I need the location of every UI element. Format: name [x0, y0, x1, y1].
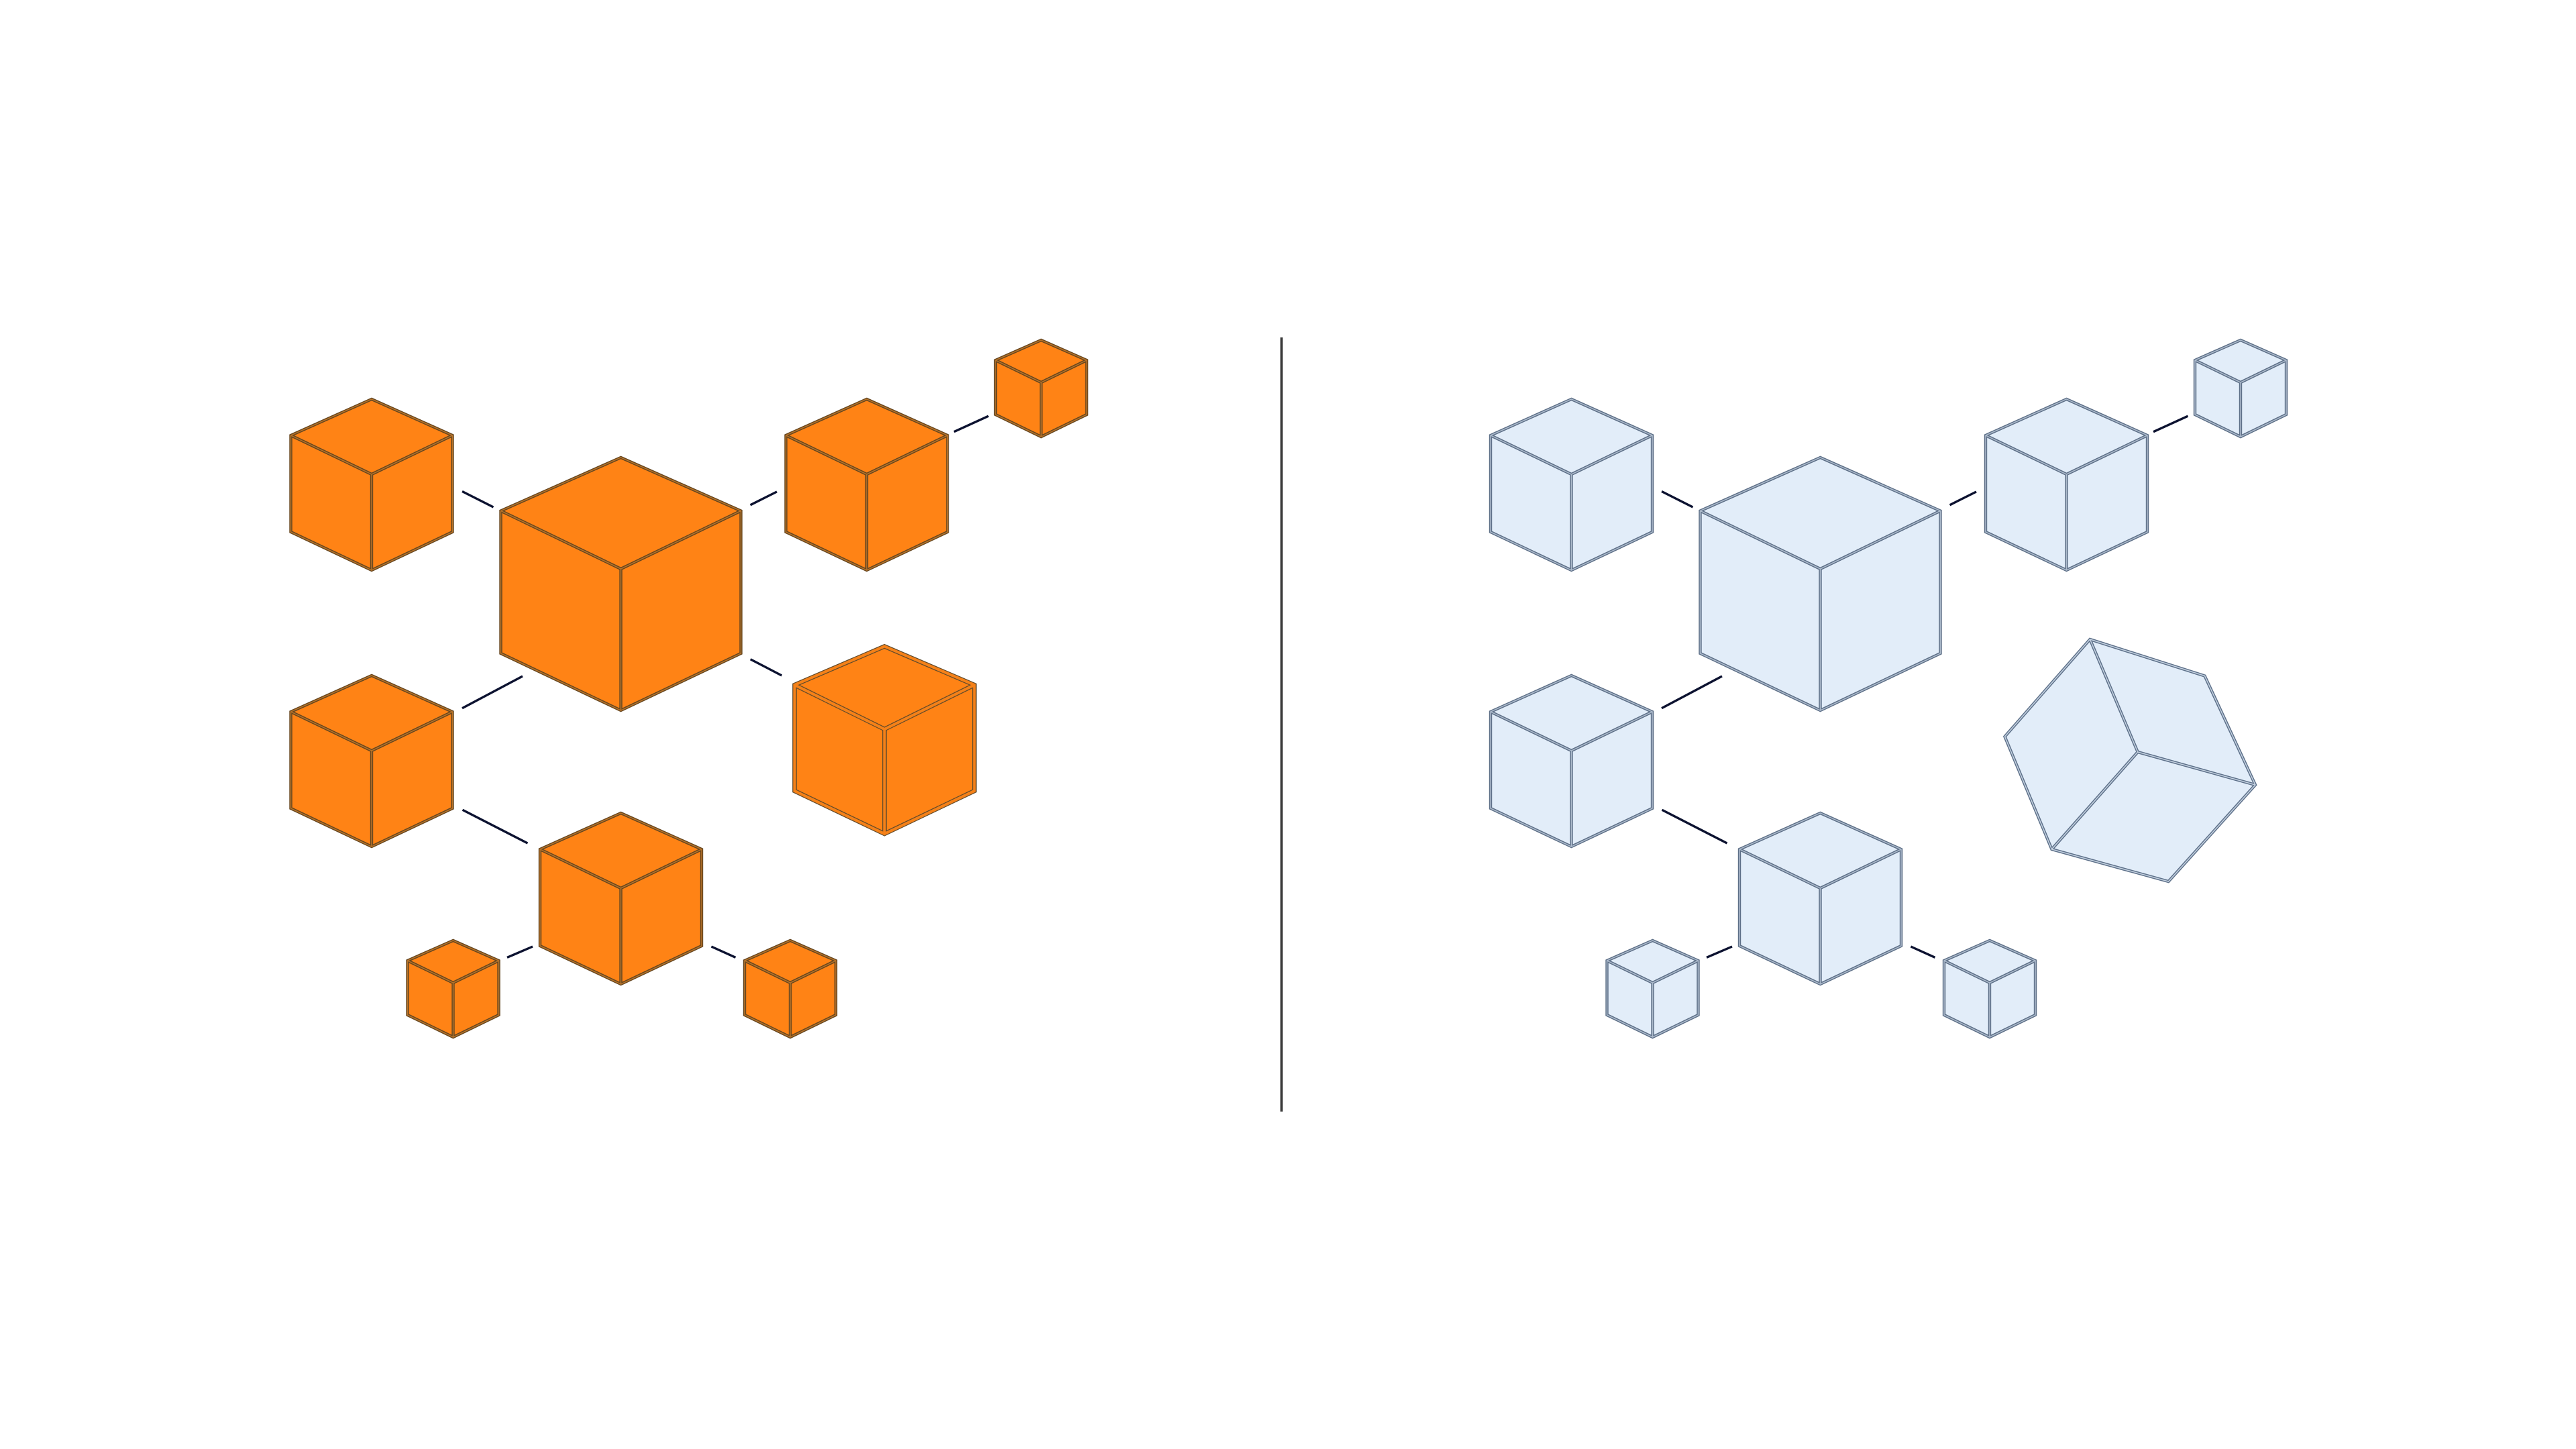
icon: highlighted orange cube with double outline: [794, 647, 974, 834]
icon: blue cube upper left: [1491, 399, 1652, 570]
icon: large central orange cube: [500, 458, 741, 710]
icon: orange small cube bottom left: [408, 941, 499, 1037]
divider: vertical line between panels: [1281, 337, 1283, 1112]
icon: large central blue cube: [1700, 458, 1940, 710]
icon: orange cube middle left: [291, 676, 452, 847]
connector lines: orange network: [462, 416, 989, 957]
icon: orange small cube top right: [996, 340, 1087, 437]
icon: blue cube middle left: [1491, 676, 1652, 847]
icon: blue small cube bottom left: [1607, 941, 1699, 1037]
icon: blue cube upper right: [1986, 399, 2147, 570]
panel: orange cube network: [291, 340, 1087, 1037]
icon: blue small cube top right: [2195, 340, 2286, 437]
icon: orange small cube bottom right: [745, 941, 836, 1037]
panel: light blue cube network: [1491, 340, 2286, 1037]
icon: blue cube lower centre: [1739, 813, 1901, 984]
icon: rotated blue cube detached from network: [2004, 639, 2255, 881]
icon: orange cube upper left: [291, 399, 452, 570]
connector lines: blue network: [1662, 416, 2188, 957]
icon: orange cube lower centre: [540, 813, 702, 984]
icon: orange cube upper right: [786, 399, 947, 570]
icon: blue small cube bottom right: [1944, 941, 2035, 1037]
